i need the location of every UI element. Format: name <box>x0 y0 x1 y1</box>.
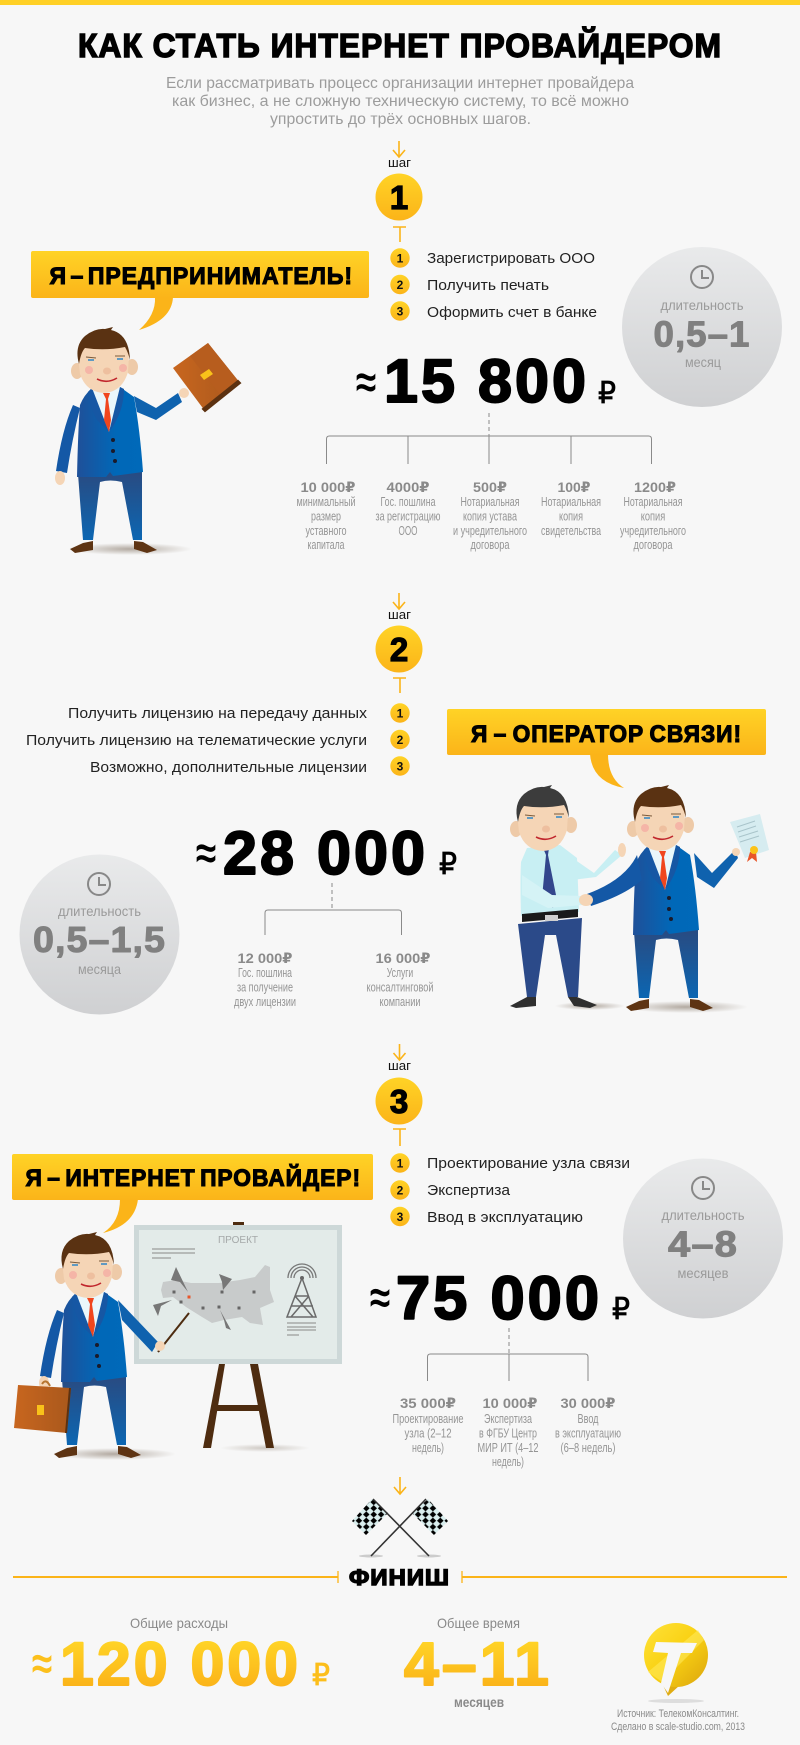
character: provider with pointer and briefcase <box>14 1232 189 1460</box>
character: entrepreneur with briefcase <box>55 327 240 555</box>
cost breakdown columns 2: Услуги <box>387 966 413 980</box>
step 3 marker: шаг <box>388 1058 411 1073</box>
cost breakdown columns 3: 10 000₽ <box>482 1395 538 1411</box>
cost breakdown columns 1: Нотариальная <box>624 495 682 509</box>
title: КАК СТАТЬ ИНТЕРНЕТ ПРОВАЙДЕРОМ <box>78 26 722 64</box>
icon: checkered flags <box>352 1499 448 1558</box>
total cost step 2: ≈ <box>196 824 216 882</box>
cost breakdown columns 3: Ввод <box>578 1412 599 1426</box>
total time summary: Общее время <box>437 1615 520 1631</box>
step 2 marker: шаг <box>388 607 411 622</box>
source credits: Сделано в scale-studio.com, 2013 <box>611 1721 745 1733</box>
step 2 marker: 2 <box>390 631 408 668</box>
cost breakdown columns 2: компании <box>380 995 421 1009</box>
step 1 task list: 3 <box>397 304 404 318</box>
character: operator holding licence <box>579 785 769 1013</box>
arrow to finish <box>394 1477 406 1494</box>
cost breakdown columns 3: МИР ИТ (4–12 <box>478 1441 539 1455</box>
intro text: как бизнес, а не сложную техническую систему, то всё можно <box>172 93 629 110</box>
speech banner: entrepreneur: Я – ПРЕДПРИНИМАТЕЛЬ! <box>50 263 353 290</box>
step 3 task list: Проектирование узла связи <box>427 1155 630 1172</box>
total cost step 2: 28 000 <box>223 819 428 887</box>
total time summary: 4–11 <box>404 1630 552 1698</box>
step 1 task list: 2 <box>397 278 404 292</box>
cost breakdown columns 1: 1200₽ <box>634 479 676 495</box>
cost breakdown columns 2: за получение <box>237 980 293 994</box>
finish heading with rule <box>13 1565 787 1590</box>
total costs summary: ≈ <box>32 1635 52 1693</box>
logo <box>644 1623 708 1703</box>
cost breakdown columns 1: 10 000₽ <box>300 479 356 495</box>
duration badge 1: 0,5–1 <box>654 314 750 354</box>
cost breakdown columns 2 <box>234 950 434 1009</box>
duration badge 1 <box>622 247 782 407</box>
total costs summary <box>32 1615 330 1698</box>
speech banner: telecom operator: Я – ОПЕРАТОР СВЯЗИ! <box>471 721 742 748</box>
cost breakdown columns 3: в эксплуатацию <box>555 1426 621 1440</box>
step 2 task list: Получить лицензию на передачу данных <box>68 705 368 722</box>
cost breakdown bracket 1 <box>326 413 652 464</box>
cost breakdown columns 3: Проектирование <box>392 1412 464 1426</box>
cost breakdown columns 1: Гос. пошлина <box>380 495 436 509</box>
total cost step 1: ₽ <box>598 377 616 410</box>
cost breakdown columns 1: копия устава <box>463 510 517 524</box>
step 2 marker <box>376 593 422 693</box>
step 2 task list: 2 <box>397 733 404 747</box>
cost breakdown columns 1: копия <box>641 510 665 524</box>
step 1 marker: 1 <box>390 179 408 216</box>
cost breakdown columns 3: Экспертиза <box>484 1412 532 1426</box>
total costs summary: 120 000 <box>60 1630 301 1698</box>
cost breakdown columns 2: Гос. пошлина <box>238 966 292 980</box>
cost breakdown columns 2: 12 000₽ <box>238 950 293 966</box>
duration badge 3: длительность <box>662 1207 744 1223</box>
step 2 task list: Получить лицензию на телематические услуги <box>26 732 367 749</box>
cost breakdown columns 1: Нотариальная <box>541 495 601 509</box>
cost breakdown columns 1: минимальный <box>296 495 356 509</box>
cost breakdown columns 1: копия <box>559 510 583 524</box>
total cost step 1: 15 800 <box>384 347 589 415</box>
cost breakdown columns 2: двух лицензии <box>234 995 296 1009</box>
cost breakdown columns 2: 16 000₽ <box>376 950 431 966</box>
speech banner: entrepreneur <box>31 251 369 330</box>
step 2 task list <box>26 703 410 776</box>
cost breakdown columns 1: договора <box>634 538 673 552</box>
intro text: Если рассматривать процесс организации интернет провайдера <box>166 75 634 92</box>
duration badge 3: месяцев <box>678 1265 728 1281</box>
cost breakdown columns 3: узла (2–12 <box>404 1426 452 1440</box>
duration badge 2 <box>20 854 180 1014</box>
cost breakdown columns 1: 500₽ <box>473 479 507 495</box>
cost breakdown columns 1: свидетельства <box>541 524 601 538</box>
finish heading with rule: ФИНИШ <box>349 1565 450 1590</box>
step 3 task list: 1 <box>397 1156 404 1170</box>
cost breakdown columns 3: 35 000₽ <box>400 1395 456 1411</box>
cost breakdown columns 1: 100₽ <box>558 479 591 495</box>
total cost step 1: ≈ <box>356 354 376 412</box>
step 3 marker: 3 <box>390 1083 408 1120</box>
cost breakdown columns 1: за регистрацию <box>376 510 440 524</box>
step 3 task list: 3 <box>397 1210 404 1224</box>
easel with project board <box>134 1222 342 1452</box>
speech banner: internet provider: Я – ИНТЕРНЕТ ПРОВАЙДЕР! <box>26 1164 361 1192</box>
step 3 task list: Ввод в эксплуатацию <box>427 1209 583 1226</box>
cost breakdown columns 3: 30 000₽ <box>560 1395 616 1411</box>
cost breakdown columns 1: уставного <box>306 524 347 538</box>
cost breakdown columns 1: и учредительного <box>453 524 527 538</box>
cost breakdown columns 1: ООО <box>398 524 418 538</box>
cost breakdown columns 3: (6–8 недель) <box>560 1441 616 1455</box>
total costs summary: Общие расходы <box>130 1615 228 1631</box>
top accent bar <box>0 0 800 5</box>
total cost step 3: 75 000 <box>396 1264 602 1332</box>
source credits: Источник: ТелекомКонсалтинг. <box>617 1708 739 1720</box>
step 2 task list: 3 <box>397 760 404 774</box>
cost breakdown bracket 2 <box>265 883 402 935</box>
intro text <box>166 75 634 128</box>
speech banner: telecom operator <box>447 709 766 788</box>
cost breakdown columns 2: консалтинговой <box>366 980 434 994</box>
cost breakdown columns 3: недель) <box>412 1441 444 1455</box>
duration badge 2: 0,5–1,5 <box>33 919 166 960</box>
step 1 task list: Зарегистрировать ООО <box>427 250 595 267</box>
cost breakdown columns 1: Нотариальная <box>460 495 520 509</box>
cost breakdown columns 3: в ФГБУ Центр <box>479 1426 537 1440</box>
total cost step 3: ≈ <box>370 1269 390 1327</box>
cost breakdown columns 1: капитала <box>308 538 345 552</box>
easel with project board: ПРОЕКТ <box>218 1235 258 1246</box>
step 1 task list: Получить печать <box>427 277 549 294</box>
total cost step 3: ₽ <box>612 1293 630 1326</box>
total cost step 2: ₽ <box>439 848 457 881</box>
duration badge 3: 4–8 <box>668 1224 738 1264</box>
cost breakdown bracket 3 <box>428 1328 588 1381</box>
step 1 task list: Оформить счет в банке <box>427 304 597 321</box>
step 1 marker <box>376 141 422 242</box>
cost breakdown columns 1: размер <box>311 510 341 524</box>
total costs summary: ₽ <box>312 1659 330 1692</box>
total time summary <box>404 1615 552 1710</box>
step 3 task list: 2 <box>397 1184 404 1198</box>
duration badge 1: длительность <box>660 297 744 313</box>
cost breakdown columns 1: учредительного <box>620 524 686 538</box>
duration badge 2: длительность <box>58 903 141 919</box>
duration badge 2: месяца <box>78 961 121 977</box>
cost breakdown columns 1: договора <box>470 538 510 552</box>
duration badge 1: месяц <box>685 354 721 370</box>
step 3 task list <box>390 1153 630 1226</box>
character: colleague in light shirt <box>510 785 626 1010</box>
cost breakdown columns 1: 4000₽ <box>386 479 430 495</box>
step 3 task list: Экспертиза <box>427 1182 511 1199</box>
intro text: упростить до трёх основных шагов. <box>270 111 531 128</box>
speech banner: internet provider <box>12 1154 373 1233</box>
cost breakdown columns 3: недель) <box>492 1455 524 1469</box>
step 1 task list <box>390 248 597 321</box>
step 1 marker: шаг <box>388 155 411 170</box>
duration badge 3 <box>623 1158 783 1318</box>
step 2 task list: 1 <box>397 706 404 720</box>
step 3 marker <box>376 1044 422 1146</box>
cost breakdown columns 3 <box>392 1395 621 1469</box>
total time summary: месяцев <box>454 1694 504 1710</box>
step 1 task list: 1 <box>397 252 404 266</box>
step 2 task list: Возможно, дополнительные лицензии <box>90 759 367 776</box>
cost breakdown columns 1 <box>296 479 686 552</box>
source credits <box>611 1708 745 1733</box>
